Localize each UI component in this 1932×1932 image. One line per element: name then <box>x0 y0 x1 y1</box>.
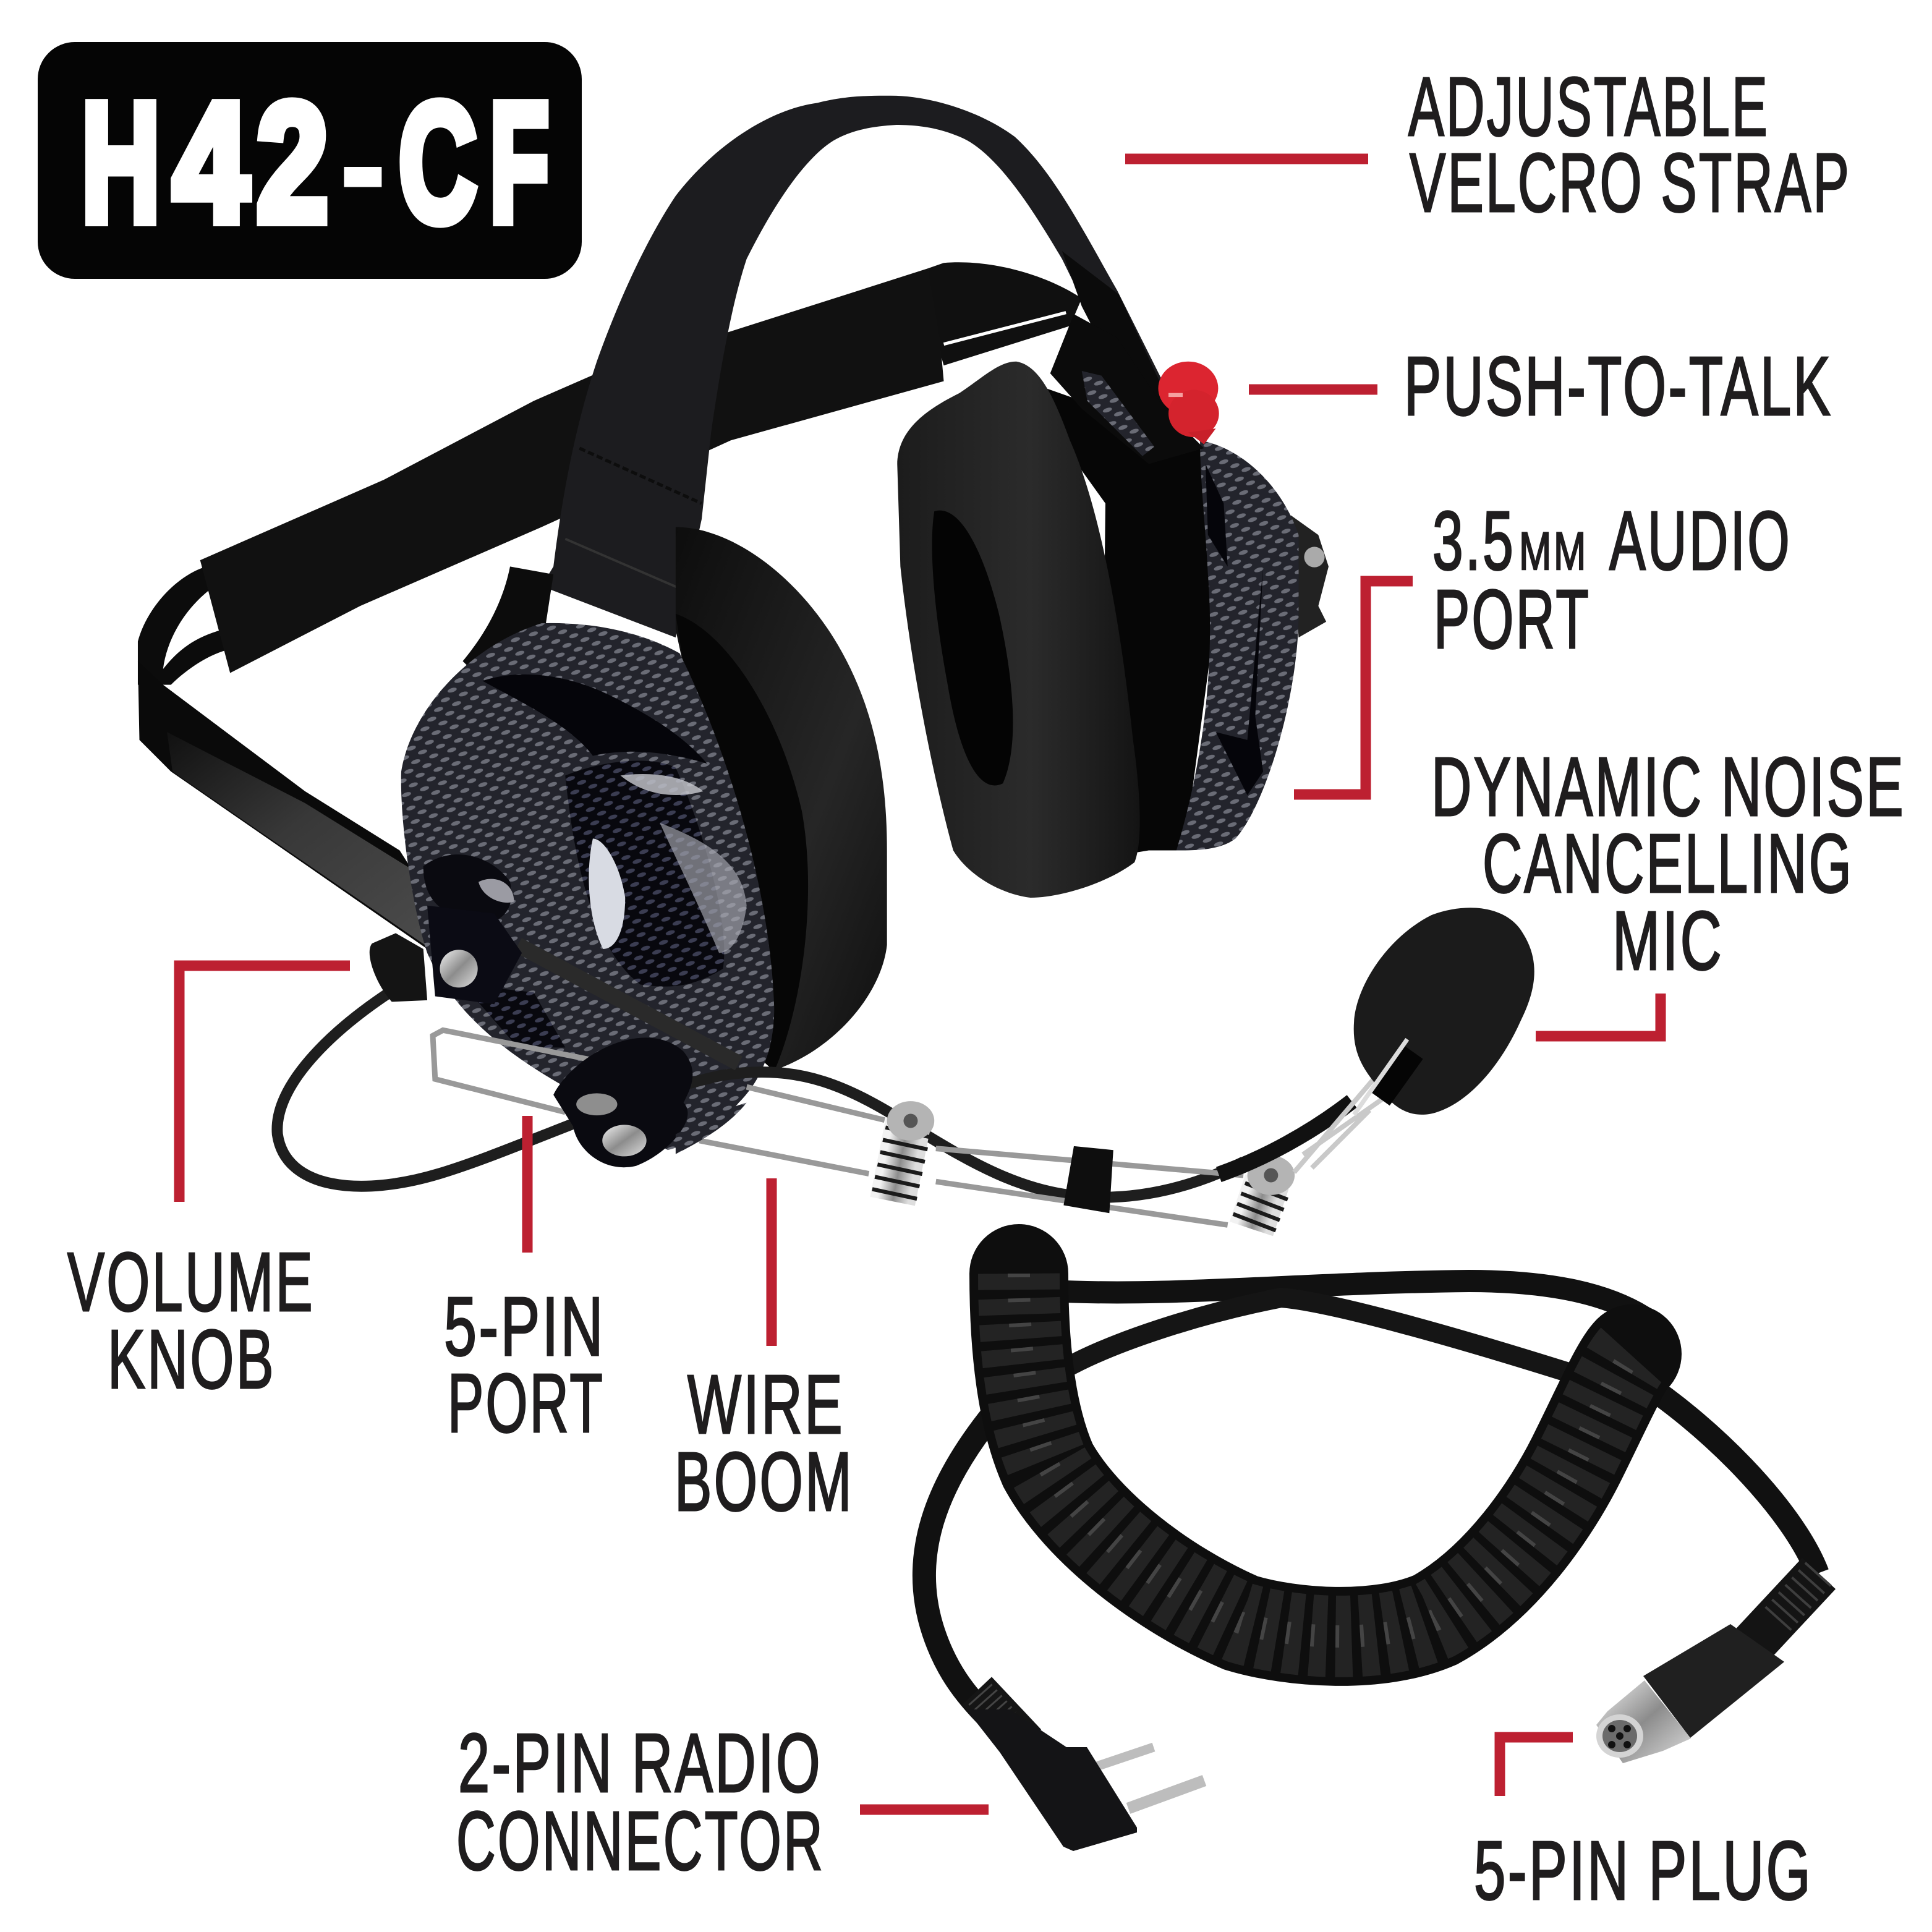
title badge: 2 <box>257 68 328 257</box>
title badge: C <box>399 68 477 257</box>
5-pin port mount <box>553 1037 747 1167</box>
spring 1 <box>887 1101 934 1204</box>
boom wires <box>1294 1037 1410 1172</box>
label: volume knob: KNOB <box>108 1313 276 1406</box>
title badge: 4 <box>173 68 249 257</box>
image: microphone <box>1219 908 1534 1175</box>
label: 2-pin radio connector: 2-PIN RADIO <box>458 1716 822 1810</box>
label: 5-pin port: PORT <box>448 1356 605 1450</box>
padded headband sleeve <box>200 268 944 673</box>
label: wire boom: WIRE <box>687 1358 845 1451</box>
velcro strap <box>542 96 1177 637</box>
title badge: F <box>490 68 549 257</box>
2-pin connector <box>966 1691 1204 1851</box>
left ear cushion <box>676 527 887 1071</box>
title badge <box>38 42 582 279</box>
left ear black tab <box>462 566 553 669</box>
label: 5-pin port <box>444 1116 605 1450</box>
label: 3.5mm audio port: PORT <box>1434 572 1591 666</box>
boom tube <box>1219 1101 1352 1175</box>
wire boom frame <box>433 1030 1243 1225</box>
label: 3.5mm audio port: MM <box>1519 522 1588 581</box>
coil <box>1019 1274 1632 1636</box>
label: 2-pin radio connector <box>456 1716 989 1887</box>
5-pin plug <box>1596 1573 1819 1763</box>
label: volume knob: VOLUME <box>67 1235 315 1329</box>
label: adjustable velcro strap <box>1125 60 1851 229</box>
left ear cup shell <box>401 623 774 1150</box>
boom arm mount and screw <box>427 906 739 1063</box>
title badge: H <box>82 68 160 257</box>
spring 2 <box>1248 1155 1295 1230</box>
label: wire boom: BOOM <box>674 1435 854 1528</box>
volume knob <box>370 933 427 1002</box>
cable right to top <box>1051 1281 1657 1326</box>
headband rear bands <box>138 262 1082 949</box>
label: dynamic noise cancelling mic: MIC <box>1612 894 1724 987</box>
coiled wire <box>277 989 1243 1198</box>
strap end and carbon strip <box>1050 314 1204 464</box>
left ear inner rim <box>676 614 808 1071</box>
label: volume knob <box>67 966 350 1406</box>
label: 2-pin radio connector: CONNECTOR <box>456 1794 825 1887</box>
label: 3.5mm audio port: AUDIO <box>1609 494 1792 587</box>
mic foam <box>1354 908 1534 1115</box>
image: headset <box>138 96 1329 1230</box>
title badge: - <box>338 68 388 257</box>
icon: red push-to-talk button <box>1158 362 1219 445</box>
clip on boom <box>1063 1146 1113 1213</box>
label: 5-pin plug <box>1474 1737 1813 1917</box>
label: 5-pin port: 5-PIN <box>444 1280 605 1373</box>
mic stem <box>1381 1052 1414 1099</box>
image: coiled cable <box>924 1274 1819 1851</box>
label: wire boom <box>674 1178 854 1528</box>
label: dynamic noise cancelling mic <box>1431 740 1905 1036</box>
cable to 5-pin plug <box>1632 1376 1818 1573</box>
right ear shell and ring <box>1015 377 1329 858</box>
label: 3.5mm audio port: 3.5 <box>1432 494 1515 587</box>
cable crossing <box>1063 1298 1607 1385</box>
label: 3.5mm audio port <box>1294 494 1792 794</box>
right ear cushion <box>897 362 1140 898</box>
cable to 2-pin connector <box>924 1403 1002 1719</box>
